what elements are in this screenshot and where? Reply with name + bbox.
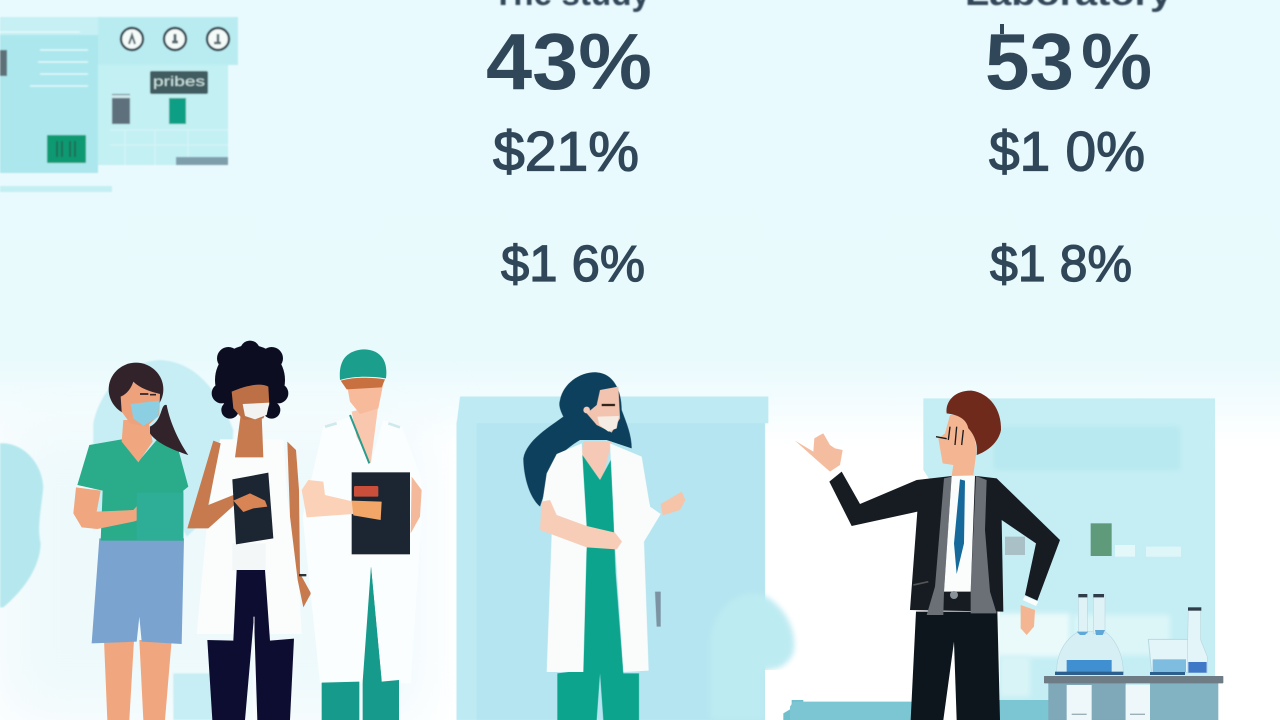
round flask [1055,594,1123,675]
grey shelf [176,157,228,165]
figure: woman with afro and tablet [187,341,311,720]
bottle [1187,607,1207,673]
illustration: control panel [0,17,238,192]
icon: dial one [121,28,143,50]
beaker [1148,639,1188,675]
wall switch [1005,537,1025,555]
statistic: 53%: 53% [985,17,1152,106]
statistic: $10%: $1 0% [989,120,1145,182]
background room: right [790,398,1215,720]
panel label [150,71,208,94]
icon: dial three [207,28,229,50]
background room: left [0,360,233,720]
icon: dial two [164,28,186,50]
figure: female doctor in white coat [523,372,685,720]
lab table [1044,676,1223,720]
grey cabinet [112,94,130,124]
green barcode block [47,135,86,163]
background room: centre [457,397,832,720]
statistic: 43%: 43% [486,17,652,106]
statistic: $18%: $1 8% [990,235,1132,292]
panel label: pribes [153,73,205,89]
wall sign [1091,523,1181,557]
figure: woman in green shirt [73,363,188,720]
figure: man in black suit [795,391,1223,720]
statistic: $21%: $21% [493,120,639,182]
green cabinet [169,98,186,124]
statistic: $16%: $1 6% [501,235,645,292]
figure: man in surgical cap with clipboard [302,349,422,720]
